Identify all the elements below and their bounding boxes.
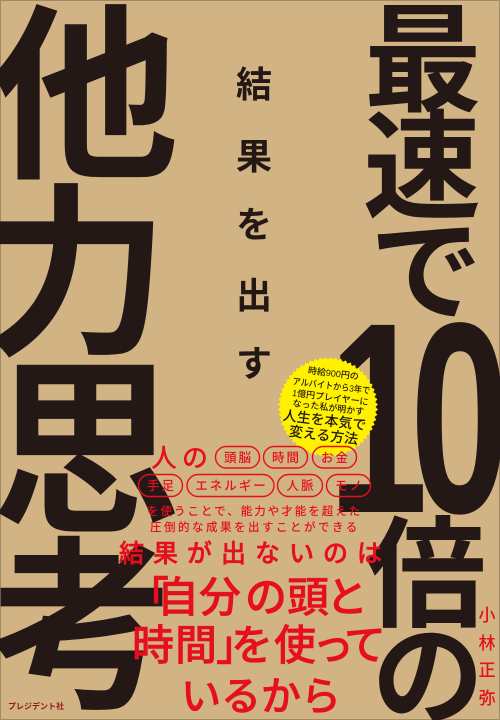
red headline: いるから: [181, 675, 341, 719]
author name: 弥: [478, 689, 496, 708]
author name: 小: [478, 606, 496, 625]
red copy: 人の: 人の: [151, 443, 213, 473]
pill labels: モノ: [335, 479, 364, 493]
title numerals: 10: [328, 265, 500, 570]
red body copy: [147, 504, 362, 534]
pill labels: 時間: [272, 450, 301, 465]
subtitle: 結果を出す: を: [236, 204, 272, 245]
badge text: [282, 364, 371, 447]
author name: 林: [478, 634, 496, 653]
author name: [478, 606, 496, 708]
resource pill tags: [138, 446, 370, 496]
red body copy: を使うことで、能力や才能を超えた: [147, 504, 362, 518]
badge text: 時給900円の: [307, 364, 359, 382]
badge text: アルバイトから3年で: [292, 375, 371, 396]
pill labels: 手足: [147, 478, 176, 493]
pill labels: お金: [321, 450, 350, 465]
red body copy: 圧倒的な成果を出すことができる: [150, 520, 360, 534]
title: right column 最速で10倍の: [363, 0, 486, 720]
badge text: なった私が明かす: [292, 397, 365, 417]
badge text: 変える方法: [288, 423, 359, 447]
pill labels: [147, 450, 364, 493]
pill labels: エネルギー: [195, 479, 268, 493]
red headline: 時間」を使って: [132, 622, 386, 669]
subtitle: 結果を出す: す: [236, 343, 272, 384]
yellow starburst badge: [278, 357, 378, 457]
subtitle: 結果を出す: 結: [236, 64, 272, 105]
title: right column 最速で10倍の: 倍: [366, 509, 486, 643]
title: right column 最速で10倍の: で: [370, 210, 482, 335]
publisher: プレジデント社: [8, 701, 64, 711]
red headline: 結果が出ないのは: [119, 540, 391, 568]
badge text: 1億円プレイヤーに: [292, 387, 369, 407]
pill labels: 人脈: [286, 478, 316, 493]
author name: 正: [478, 661, 496, 680]
title: left column 他力思考: [0, 0, 181, 720]
badge text: 人生を本気で: [282, 407, 367, 433]
subtitle: 結果を出す: 果: [236, 136, 272, 177]
red headline: 「自分の頭と: [127, 574, 368, 621]
subtitle: 結果を出す: [236, 64, 272, 384]
red headline: [119, 540, 391, 719]
title numerals: 10: 1: [328, 265, 428, 570]
pill labels: 頭脳: [224, 451, 253, 465]
title: right column 最速で10倍の: 速: [363, 103, 481, 235]
subtitle: 結果を出す: 出: [236, 275, 272, 316]
